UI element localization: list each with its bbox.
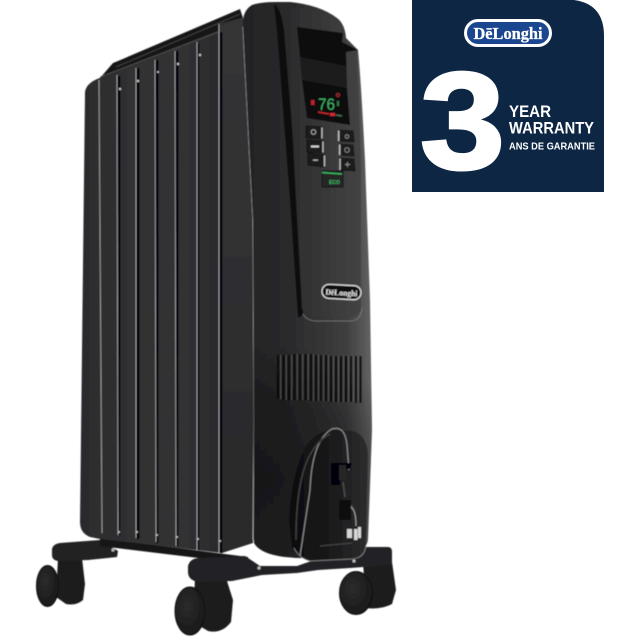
light fin edges bbox=[99, 24, 254, 553]
brand badge on heater: DēLonghi bbox=[325, 287, 358, 298]
plug prongs bbox=[347, 527, 361, 540]
front caster bbox=[175, 578, 233, 635]
display window bbox=[300, 57, 347, 88]
heater stand and casters bbox=[36, 538, 396, 635]
panel lower rim bbox=[303, 308, 362, 321]
carry handle recess bbox=[297, 27, 358, 88]
fin rivets bbox=[118, 54, 221, 542]
front bar joining arms bbox=[100, 538, 248, 564]
lower body shading bbox=[253, 340, 372, 558]
vent grille bbox=[278, 354, 360, 403]
eco button: ECO bbox=[329, 180, 340, 186]
dark slots between fins bbox=[119, 32, 221, 553]
De'Longhi logo pill: DēLonghi bbox=[474, 24, 543, 43]
cord compartment bbox=[289, 428, 368, 561]
right buttons bbox=[338, 130, 355, 171]
cord clip bbox=[331, 463, 352, 485]
brand badge on heater bbox=[322, 284, 361, 300]
display readout: 76 bbox=[318, 95, 335, 114]
left stand arm bbox=[52, 540, 118, 561]
warranty text: YEAR bbox=[509, 102, 551, 121]
top rail bbox=[100, 9, 243, 78]
plug bbox=[343, 482, 352, 518]
heater body side bbox=[243, 2, 372, 558]
dark seam beside control panel bbox=[274, 4, 303, 318]
upper body shell bbox=[243, 2, 372, 558]
bay recess bbox=[289, 430, 368, 561]
warranty text: WARRANTY bbox=[509, 118, 595, 138]
power cord loop bbox=[300, 428, 349, 556]
heater fins bbox=[80, 9, 254, 553]
warranty text bbox=[509, 102, 595, 152]
rear-right caster bbox=[340, 562, 396, 614]
rear-left caster bbox=[36, 558, 85, 606]
De'Longhi logo pill bbox=[466, 20, 550, 46]
stand hardware bbox=[111, 548, 356, 570]
left buttons bbox=[306, 126, 325, 167]
badge background bbox=[412, 0, 604, 192]
warranty badge bbox=[412, 0, 604, 198]
panel face bbox=[286, 8, 361, 317]
front and right stand arm bbox=[188, 547, 392, 582]
eco button bbox=[322, 171, 343, 187]
display readout bbox=[311, 93, 342, 116]
heater product photo bbox=[36, 2, 396, 635]
control panel bbox=[286, 8, 362, 321]
large end fin bbox=[219, 18, 254, 553]
warranty text: ANS DE GARANTIE bbox=[509, 142, 595, 152]
fin block bbox=[80, 18, 254, 553]
large numeral 3: 3 bbox=[420, 44, 505, 198]
